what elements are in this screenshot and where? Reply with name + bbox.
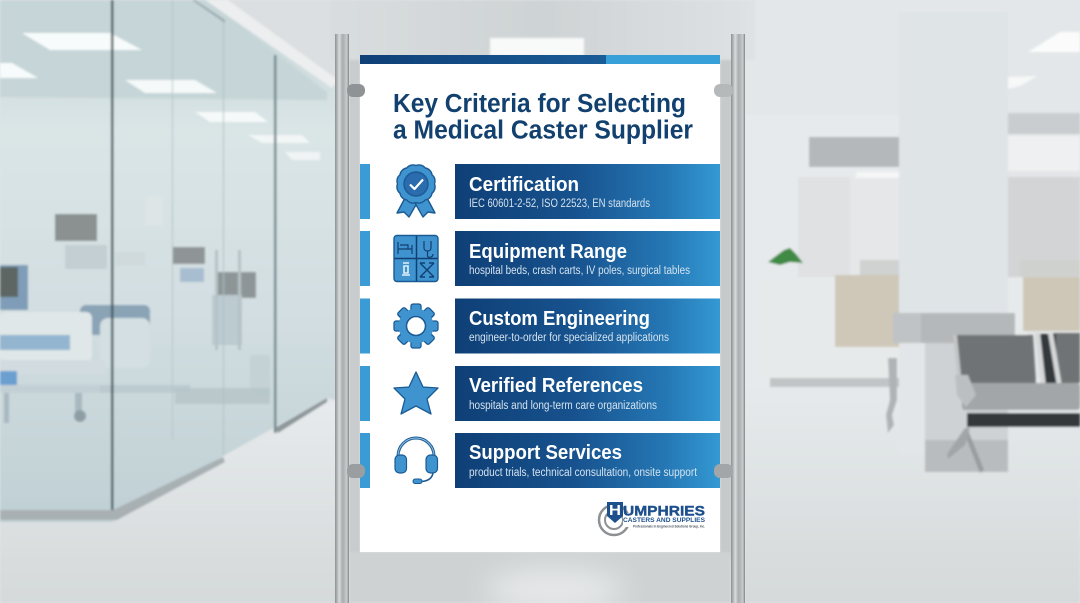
heading: Verified References bbox=[469, 375, 643, 397]
right pole bbox=[731, 34, 745, 603]
lower left bracket bbox=[347, 464, 365, 478]
row: Verified References bbox=[360, 366, 720, 421]
row: Certification bbox=[360, 164, 720, 219]
room contents bbox=[55, 214, 97, 241]
icon: star bbox=[394, 372, 438, 414]
icon: headset bbox=[395, 438, 438, 484]
row: Custom Engineering bbox=[360, 298, 720, 354]
upper left bracket bbox=[347, 84, 365, 97]
chair leg behind bbox=[886, 358, 897, 433]
reception desk bbox=[757, 279, 900, 379]
icon: gear bbox=[394, 304, 438, 348]
logo: Humphries Casters and Supplies: CASTERS AND SUPPLIES bbox=[623, 517, 705, 524]
center area around sign bbox=[330, 0, 755, 603]
ceiling lights bbox=[22, 33, 142, 50]
right lobby bbox=[745, 0, 1080, 603]
bar bbox=[455, 164, 720, 219]
column bbox=[899, 12, 1008, 314]
description: IEC 60601-2-52, ISO 22523, EN standards bbox=[469, 198, 650, 210]
title bbox=[393, 90, 693, 144]
row: Equipment Range bbox=[360, 231, 720, 286]
logo: Humphries Casters and Supplies: UMPHRIES bbox=[623, 502, 705, 518]
floor glow under sign bbox=[485, 568, 625, 603]
bar bbox=[455, 298, 720, 354]
heading: Support Services bbox=[469, 442, 622, 464]
row: Support Services bbox=[360, 433, 720, 488]
description: hospitals and long-term care organizations bbox=[469, 400, 657, 412]
description: engineer-to-order for specialized applications bbox=[469, 332, 669, 344]
heading: Equipment Range bbox=[469, 241, 627, 263]
plant bbox=[768, 248, 803, 265]
heading: Custom Engineering bbox=[469, 308, 650, 330]
chairs bbox=[955, 335, 1036, 383]
lower right bracket bbox=[714, 464, 733, 478]
icon: rosette badge bbox=[397, 165, 435, 217]
bar bbox=[455, 366, 720, 421]
description: hospital beds, crash carts, IV poles, surgical tables bbox=[469, 265, 690, 277]
left pole bbox=[335, 34, 349, 603]
logo: Humphries Casters and Supplies: H bbox=[609, 502, 621, 519]
left glass room bbox=[0, 0, 345, 603]
sign panel bbox=[360, 55, 720, 552]
glass frames bbox=[111, 0, 114, 510]
description: product trials, technical consultation, onsite support bbox=[469, 467, 698, 479]
title: Key Criteria for Selecting bbox=[393, 90, 686, 118]
bar bbox=[455, 231, 720, 286]
heading: Certification bbox=[469, 174, 579, 196]
bar bbox=[455, 433, 720, 488]
logo: Humphries Casters and Supplies bbox=[599, 502, 705, 535]
title: a Medical Caster Supplier bbox=[393, 116, 693, 144]
upper right bracket bbox=[714, 84, 733, 97]
icon: equipment grid bbox=[394, 236, 438, 282]
logo: Humphries Casters and Supplies: Professionals in Engineered Solutions Group, Inc. bbox=[633, 524, 705, 528]
top accent bar bbox=[360, 55, 720, 64]
